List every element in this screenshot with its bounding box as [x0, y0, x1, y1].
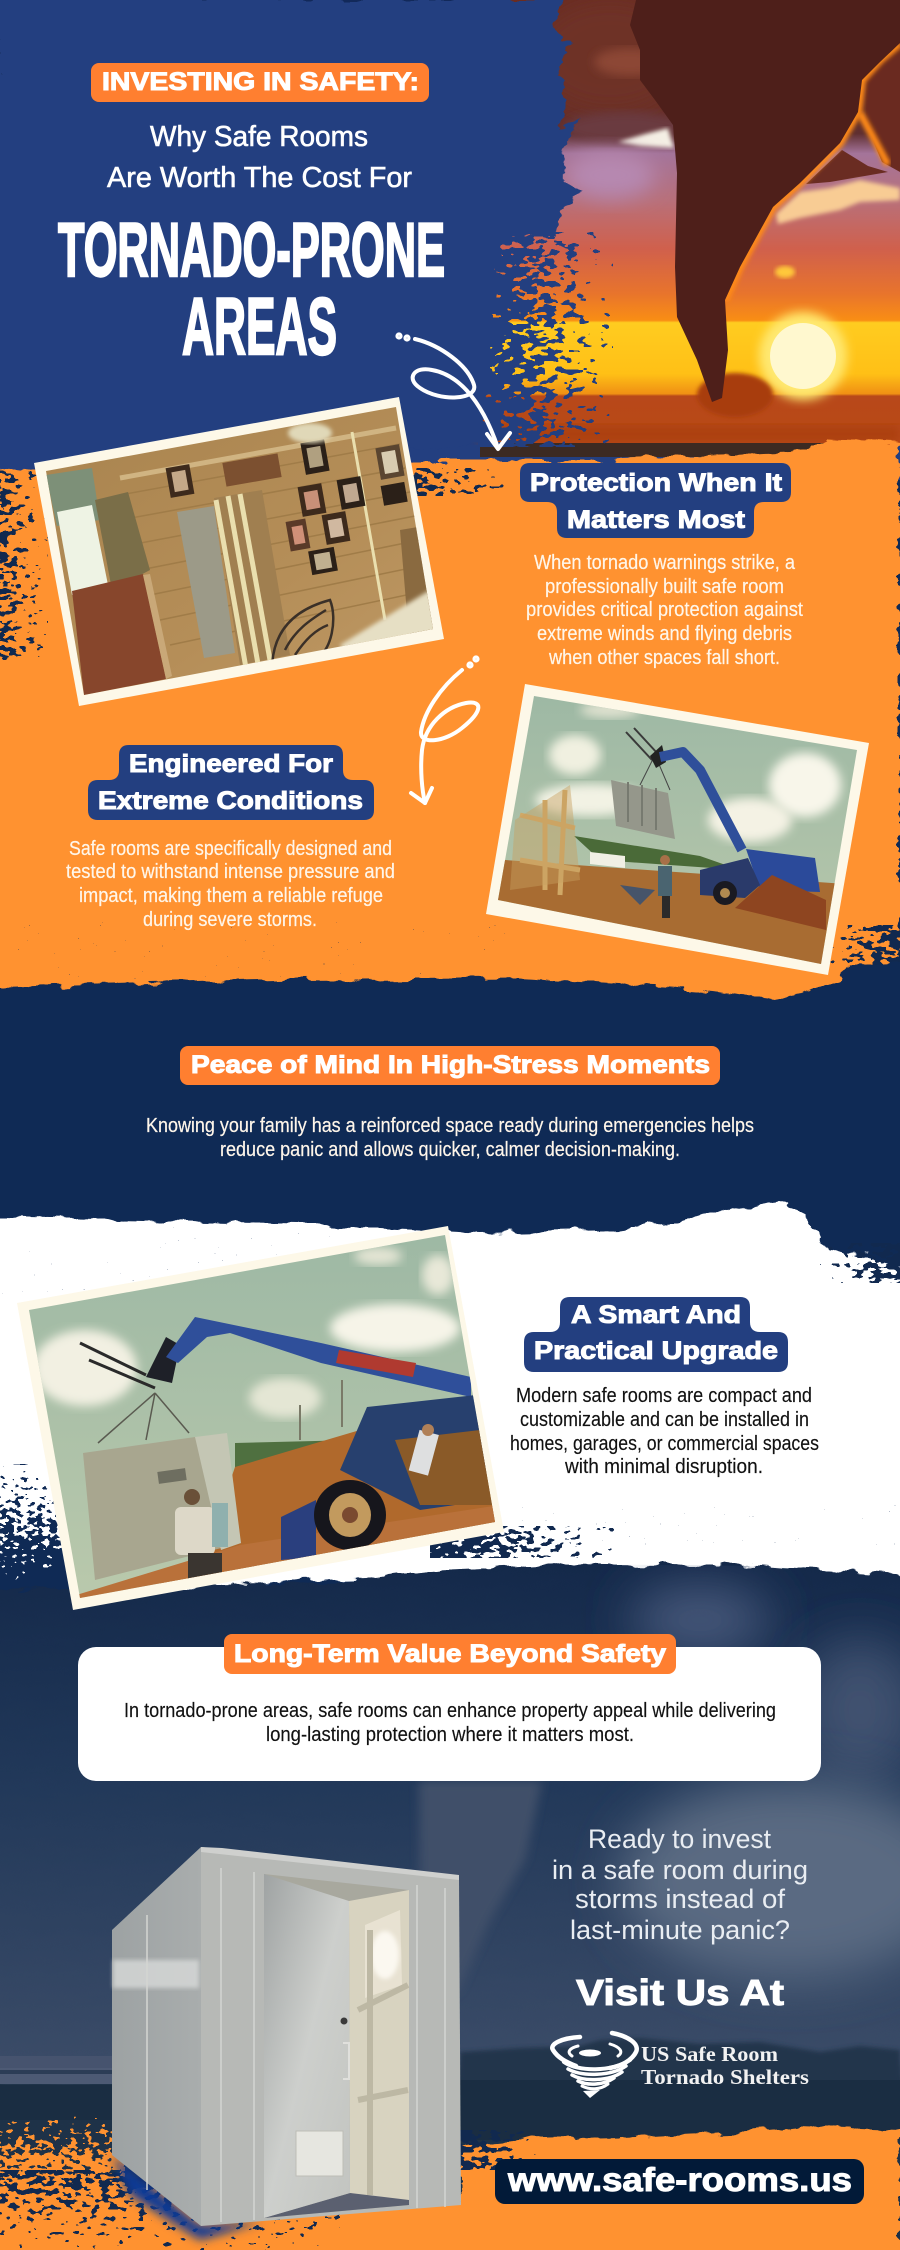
illustration: steel safe room with open door [112, 1847, 461, 2226]
panel: orange section background [0, 440, 900, 1000]
section heading: Peace of Mind [180, 1046, 720, 1085]
text: protection description: when other spaces fall short. [548, 647, 780, 669]
logo: US Safe Room Tornado Shelters: Tornado Shelters [641, 2065, 809, 2089]
text: peace of mind description: Knowing your family has a reinforced space ready during emergencies helps [146, 1115, 754, 1137]
card text [124, 1700, 776, 1746]
card text: In tornado-prone areas, safe rooms can enhance property appeal while delivering [124, 1700, 776, 1722]
text: smart upgrade description: homes, garages, or commercial spaces [510, 1433, 819, 1455]
speckled white edge left of crane photo [0, 1465, 70, 1580]
website pill [495, 2159, 864, 2204]
card heading [224, 1634, 676, 1674]
card heading: Long-Term Value Beyond Safety [234, 1640, 666, 1668]
arrow: curl from title to first section [397, 334, 510, 449]
logo: US Safe Room Tornado Shelters: US Safe Room [641, 2042, 779, 2066]
section heading: A Smart And Practical Upgrade: Practical Upgrade [534, 1337, 778, 1365]
text: protection description: extreme winds and flying debris [537, 623, 792, 645]
text: call to action question [552, 1824, 808, 1945]
panel: bottom orange band [0, 2115, 900, 2250]
text: protection description [526, 552, 803, 669]
speckled navy fray along white edge [430, 1526, 620, 1558]
logo: US Safe Room Tornado Shelters [552, 2033, 809, 2098]
website pill: www.safe-rooms.us [507, 2161, 852, 2198]
text: call to action question: last-minute panic? [570, 1915, 790, 1945]
panel: blue header background [0, 0, 900, 480]
section heading: A Smart And Practical Upgrade: A Smart And [571, 1301, 741, 1329]
text: protection description: When tornado warnings strike, a [534, 552, 796, 574]
photo: close-up of crane and safe room [17, 1225, 504, 1610]
heading pill: Investing in Safety [91, 63, 429, 102]
text: call to action question: storms instead of [575, 1884, 786, 1914]
text: engineered description: impact, making them a reliable refuge [79, 885, 383, 907]
arrow: curl from first to second section [411, 657, 478, 803]
subtitle [107, 121, 412, 194]
photo: wood-paneled safe room interior [30, 397, 450, 706]
text: protection description: provides critical protection against [526, 599, 803, 621]
text: smart upgrade description: with minimal disruption. [564, 1456, 763, 1478]
text: smart upgrade description: Modern safe rooms are compact and [516, 1385, 812, 1407]
panel: white section background [0, 1200, 900, 1610]
section heading: Protection When It Matters Most: Matters Most [567, 506, 746, 534]
panel: navy section background [0, 962, 900, 1300]
panel: stormy background [0, 1564, 900, 2250]
heading: Visit Us At: Visit Us At [576, 1972, 784, 2013]
text: smart upgrade description [510, 1385, 819, 1478]
text: call to action question: in a safe room during [552, 1855, 808, 1885]
section heading: Engineered For Extreme Conditions: Engineered For [129, 750, 333, 778]
text: peace of mind description: reduce panic and allows quicker, calmer decision-making. [220, 1139, 680, 1161]
section heading: Engineered For Extreme Conditions: Extreme Conditions [98, 787, 363, 815]
section heading: Engineered For Extreme Conditions [88, 745, 374, 820]
photo: safe room lifted by crane at build site [480, 684, 880, 980]
blue torn edge over photo [0, 0, 613, 480]
section heading: Protection When It Matters Most [520, 463, 791, 538]
section heading: A Smart And Practical Upgrade [524, 1297, 788, 1372]
text: engineered description [66, 838, 395, 931]
section heading: Peace of Mind: Peace of Mind In High-Stress Moments [191, 1051, 710, 1079]
heading pill: Investing in Safety: INVESTING IN SAFETY: [102, 68, 419, 96]
card text: long-lasting protection where it matters most. [266, 1724, 634, 1746]
subtitle: Why Safe Rooms [150, 121, 368, 153]
subtitle: Are Worth The Cost For [107, 162, 412, 194]
text: engineered description: tested to withstand intense pressure and [66, 861, 395, 883]
text: smart upgrade description: customizable and can be installed in [520, 1409, 809, 1431]
text: call to action question: Ready to invest [588, 1824, 771, 1854]
text: engineered description: during severe storms. [143, 909, 317, 931]
title [58, 208, 445, 372]
text: engineered description: Safe rooms are specifically designed and [69, 838, 392, 860]
title: AREAS [182, 282, 337, 372]
photo: tornado at sunset [480, 0, 900, 457]
section heading: Protection When It Matters Most: Protection When It [530, 469, 783, 497]
title: TORNADO-PRONE [58, 208, 445, 293]
card: Long-Term Value Beyond Safety [78, 1634, 821, 1781]
text: protection description: professionally built safe room [545, 576, 784, 598]
text: peace of mind description [146, 1115, 754, 1161]
